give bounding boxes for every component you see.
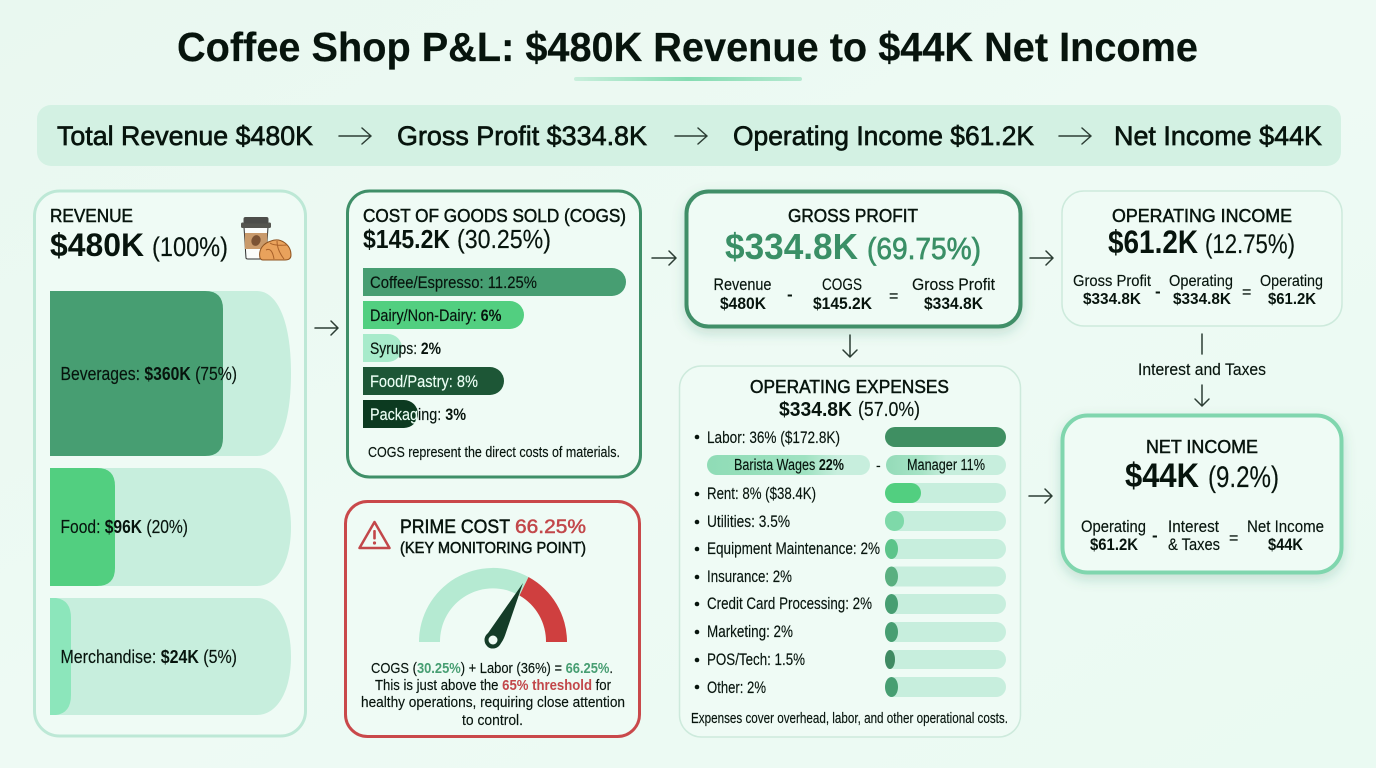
gross profit heading: GROSS PROFIT	[788, 205, 918, 226]
row: labor	[695, 427, 1006, 447]
prime cost explanation: healthy operations, requiring close attention	[361, 694, 625, 711]
row: other	[695, 677, 1006, 697]
row: equipment maintenance	[695, 539, 1006, 559]
COGS heading: COST OF GOODS SOLD (COGS)	[363, 205, 626, 226]
row: marketing: Marketing: 2%	[707, 622, 793, 641]
icon: coffee cup and croissant	[241, 217, 291, 260]
net income value: $44K	[1125, 457, 1199, 495]
row: marketing	[695, 622, 1006, 642]
banner: operating income: Operating Income $61.2K	[733, 121, 1034, 151]
panel: gross profit	[686, 192, 1020, 326]
operating expenses value	[779, 399, 920, 421]
bar: coffee/espresso	[363, 268, 626, 296]
prime cost heading	[400, 516, 586, 557]
net income formula: $44K	[1268, 536, 1303, 554]
row: labor breakdown: -	[876, 457, 881, 473]
revenue value	[50, 227, 228, 263]
operating income heading: OPERATING INCOME	[1112, 205, 1292, 226]
row: labor: Labor: 36% ($172.8K)	[707, 428, 840, 447]
row: labor breakdown: Manager 11%	[907, 457, 985, 474]
net income formula: =	[1229, 530, 1238, 547]
arrow: gross profit to operating income	[1030, 251, 1053, 265]
row: POS/tech	[695, 650, 1006, 669]
net income heading: NET INCOME	[1146, 436, 1258, 457]
net income formula: Net Income	[1247, 518, 1324, 536]
bar: merchandise	[50, 598, 291, 715]
arrow	[339, 128, 371, 144]
operating income formula: Operating	[1260, 273, 1323, 290]
gross profit formula: $145.2K	[813, 295, 872, 313]
revenue value: $480K	[50, 227, 144, 263]
bar: merchandise: Merchandise: $24K (5%)	[60, 647, 237, 667]
bar: food: Food: $96K (20%)	[60, 517, 188, 537]
row: utilities	[695, 511, 1006, 531]
gross profit formula: Gross Profit	[912, 276, 995, 294]
gross profit formula: Revenue	[714, 276, 772, 294]
prime cost explanation: to control.	[462, 712, 523, 729]
title: Coffee Shop P&L: $480K Revenue to $44K Net Income	[177, 24, 1198, 70]
operating expenses value: $334.8K	[779, 399, 853, 421]
gauge	[419, 568, 567, 648]
operating expenses value: (57.0%)	[858, 399, 920, 421]
bar: coffee/espresso: Coffee/Espresso: 11.25%	[370, 274, 537, 292]
panel: revenue	[34, 191, 306, 736]
arrow	[1059, 128, 1091, 144]
panel: prime cost	[346, 502, 640, 736]
bar: food/pastry: Food/Pastry: 8%	[370, 373, 478, 391]
COGS value: (30.25%)	[457, 224, 551, 254]
gross profit value: (69.75%)	[867, 231, 981, 266]
bar: syrups: Syrups: 2%	[370, 340, 441, 358]
row: POS/tech: POS/Tech: 1.5%	[707, 650, 805, 669]
arrow: gross profit to operating expenses	[843, 335, 857, 357]
row: insurance	[695, 566, 1006, 586]
prime cost explanation	[361, 660, 625, 729]
banner: net income: Net Income $44K	[1114, 121, 1322, 151]
panel: operating income	[1062, 191, 1342, 326]
gross profit formula: =	[889, 288, 898, 305]
row: equipment maintenance: Equipment Maintenance: 2%	[707, 539, 880, 558]
gross profit formula	[714, 276, 995, 313]
arrow	[675, 128, 707, 144]
connector: interest and taxes: Interest and Taxes	[1138, 360, 1266, 379]
bar: dairy	[363, 301, 524, 329]
gross profit formula: $480K	[720, 295, 766, 313]
prime cost heading: PRIME COST	[400, 516, 510, 538]
operating income formula: Operating	[1169, 273, 1233, 290]
icon: warning triangle	[360, 522, 390, 548]
net income formula: Operating	[1081, 518, 1146, 536]
bar: dairy: Dairy/Non-Dairy: 6%	[370, 307, 502, 325]
net income value: (9.2%)	[1208, 461, 1279, 494]
arrow: operating expenses to net income	[1029, 489, 1052, 503]
bar: food/pastry	[363, 367, 504, 395]
net income value	[1125, 457, 1279, 495]
banner: total revenue: Total Revenue $480K	[57, 121, 313, 151]
operating income formula: $334.8K	[1173, 291, 1231, 308]
prime cost explanation: COGS (30.25%) + Labor (36%) = 66.25%.	[371, 660, 613, 677]
COGS value: $145.2K	[363, 224, 450, 254]
operating income value	[1108, 224, 1295, 260]
connector: interest and taxes	[1138, 334, 1266, 406]
panel: net income	[1062, 416, 1342, 572]
operating income formula: -	[1155, 282, 1161, 301]
COGS note: COGS represent the direct costs of materials.	[368, 445, 620, 461]
net income formula	[1081, 518, 1324, 554]
revenue value: (100%)	[152, 232, 228, 262]
operating income formula	[1073, 273, 1323, 308]
net income formula: & Taxes	[1168, 536, 1220, 554]
row: credit card processing: Credit Card Processing: 2%	[707, 594, 872, 613]
operating income formula: $61.2K	[1268, 291, 1316, 308]
row: utilities: Utilities: 3.5%	[707, 512, 790, 531]
operating income formula: =	[1242, 284, 1251, 301]
operating income value: (12.75%)	[1205, 229, 1295, 259]
net income formula: Interest	[1168, 518, 1219, 536]
row: credit card processing	[695, 594, 1006, 614]
revenue heading: REVENUE	[50, 205, 133, 226]
bar: syrups	[363, 334, 441, 362]
gross profit value	[725, 226, 981, 267]
bar: beverages	[50, 291, 291, 456]
arrow: revenue to COGS	[315, 321, 338, 335]
bar: beverages: Beverages: $360K (75%)	[60, 364, 237, 384]
operating expenses heading: OPERATING EXPENSES	[750, 376, 949, 397]
arrow: COGS to gross profit	[652, 251, 676, 265]
gross profit formula: -	[787, 285, 793, 304]
gross profit formula: COGS	[822, 276, 862, 294]
operating income formula: Gross Profit	[1073, 273, 1152, 290]
panel: operating expenses	[680, 366, 1020, 737]
bar: packaging: Packaging: 3%	[370, 406, 466, 424]
gross profit formula: $334.8K	[924, 295, 983, 313]
operating expenses note: Expenses cover overhead, labor, and other operational costs.	[691, 711, 1008, 727]
gross profit value: $334.8K	[725, 226, 858, 267]
row: insurance: Insurance: 2%	[707, 567, 792, 586]
summary flow banner	[37, 105, 1341, 166]
row: other: Other: 2%	[707, 678, 766, 697]
COGS value	[363, 224, 551, 254]
banner: gross profit: Gross Profit $334.8K	[397, 121, 647, 151]
net income formula: -	[1152, 526, 1158, 545]
net income formula: $61.2K	[1090, 536, 1138, 554]
bar: packaging	[363, 400, 466, 428]
operating income formula: $334.8K	[1083, 291, 1141, 308]
row: rent	[695, 483, 1006, 503]
prime cost explanation: This is just above the 65% threshold for	[375, 677, 611, 694]
row: labor breakdown: Barista Wages 22%	[734, 457, 844, 474]
panel: cost of goods sold	[348, 191, 640, 477]
row: labor breakdown	[707, 455, 1006, 475]
bar: food	[50, 468, 291, 586]
prime cost heading: 66.25%	[515, 516, 586, 538]
operating income value: $61.2K	[1108, 224, 1198, 260]
row: rent: Rent: 8% ($38.4K)	[707, 484, 816, 503]
prime cost heading: (KEY MONITORING POINT)	[400, 540, 586, 557]
